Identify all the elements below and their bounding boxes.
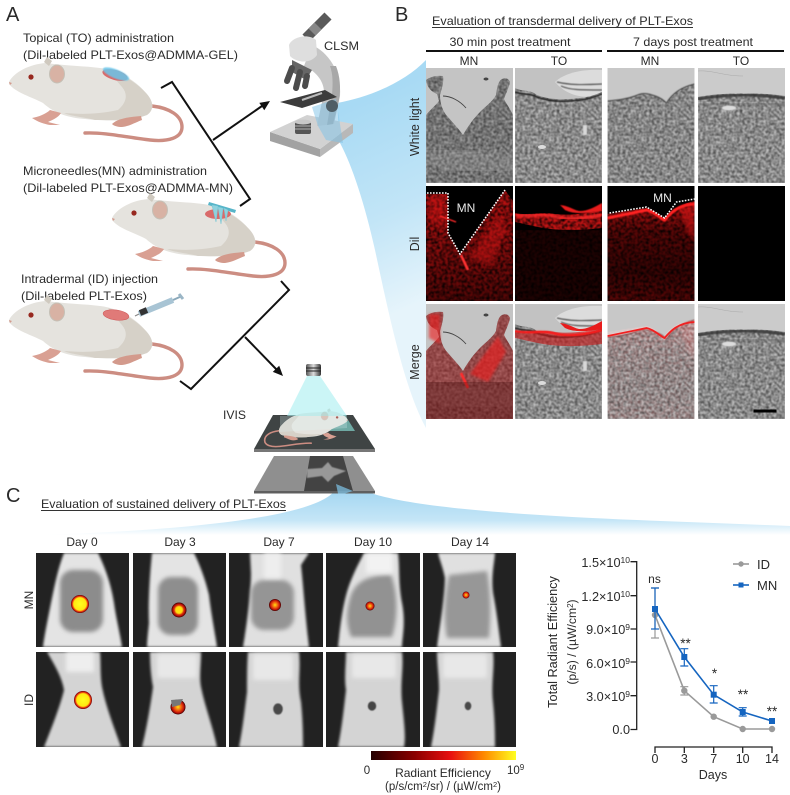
y tick label: 6.0×10 — [586, 657, 625, 671]
y tick label: 9 — [625, 622, 630, 632]
y axis units: 2 — [566, 603, 575, 608]
micrograph: Dil TO 7 days — [698, 186, 785, 301]
y tick label: 9.0×10 — [586, 623, 625, 637]
day label: Day 7 — [263, 535, 295, 549]
column label MN: MN — [460, 54, 478, 68]
row label MN: MN — [22, 591, 36, 609]
panel B: transdermal delivery — [395, 4, 785, 419]
significance: day 3: ** — [680, 636, 691, 651]
micrograph: merge TO 7 days — [698, 304, 785, 419]
x tick label: 10 — [736, 752, 750, 766]
label: CLSM: CLSM — [324, 39, 359, 53]
image: MN day 3 — [133, 553, 226, 647]
micrograph: white light MN 30 min — [426, 68, 513, 183]
significance: ns: ns — [648, 572, 661, 586]
image: ID day 7 — [229, 652, 323, 747]
arrow: to CLSM — [213, 101, 270, 140]
y axis units: (p/s) / (µW/cm — [565, 608, 579, 685]
label: topical administration: Topical (TO) administration — [23, 31, 174, 45]
color bar maximum: 10 — [507, 765, 520, 777]
panel title: Evaluation of transdermal delivery of PLT-Exos — [432, 14, 693, 28]
bracket: MN and ID to IVIS — [180, 281, 289, 389]
icon: syringe — [135, 294, 183, 316]
micrograph: Dil MN 30 min — [426, 186, 513, 301]
micrograph: Dil MN 30 min: MN — [457, 201, 475, 215]
panel title: Evaluation of sustained delivery of PLT-Exos — [41, 497, 286, 511]
label: IVIS: IVIS — [223, 408, 246, 422]
significance: day 10: ** — [738, 687, 749, 702]
image: ID day 10 — [326, 652, 420, 747]
arrow: to IVIS — [245, 337, 283, 376]
light beam: IVIS to panel C — [40, 486, 790, 535]
color bar units: 2 — [493, 780, 497, 789]
column label TO: TO — [551, 54, 567, 68]
image: ID day 14 — [423, 652, 516, 747]
x axis title: Days — [699, 768, 727, 782]
y tick label: 9 — [625, 656, 630, 666]
image: MN day 14 — [423, 553, 516, 647]
micrograph: Dil MN 7 days — [608, 186, 694, 301]
legend: MN: MN — [757, 578, 777, 593]
line chart: total radiant efficiency — [546, 555, 779, 782]
y tick label: 1.5×10 — [581, 556, 621, 570]
day label: Day 0 — [66, 535, 98, 549]
row label Merge: Merge — [408, 344, 422, 380]
micrograph: white light TO 30 min — [515, 68, 602, 183]
y axis units: ) — [565, 599, 579, 603]
micrograph: Dil TO 30 min — [515, 186, 602, 301]
label: intradermal injection: Intradermal (ID) injection — [21, 272, 158, 286]
y axis title: Total Radiant Efficiency — [546, 576, 560, 708]
significance: day 14: ** — [767, 704, 778, 719]
micrograph: merge MN 7 days — [608, 304, 694, 419]
row label White light: White light — [408, 97, 422, 156]
image: MN day 0 — [36, 553, 129, 647]
micrograph: merge MN 30 min — [426, 304, 513, 419]
color bar units: ) — [497, 781, 501, 793]
row label ID: ID — [22, 694, 36, 706]
panel A: administration schematic — [6, 4, 375, 494]
day label: Day 10 — [354, 535, 392, 549]
panel C: sustained delivery — [6, 485, 779, 793]
series: ID — [651, 588, 775, 732]
heading: 7 days: 7 days post treatment — [633, 35, 754, 49]
x tick label: 3 — [681, 752, 688, 766]
panel letter C: C — [6, 485, 20, 507]
day label: Day 3 — [164, 535, 196, 549]
label: intradermal formulation: (Dil-labeled PLT-Exos) — [21, 289, 147, 303]
day label: Day 14 — [451, 535, 489, 549]
y tick label: 3.0×10 — [586, 690, 625, 704]
mouse: microneedles — [112, 193, 285, 276]
micrograph: white light TO 7 days — [698, 68, 785, 183]
label: microneedle formulation: (Dil-labeled PLT-Exos@ADMMA-MN) — [23, 181, 233, 195]
image: ID day 3 — [133, 652, 226, 747]
color bar minimum: 0 — [364, 765, 370, 777]
image: ID day 0 — [36, 652, 129, 747]
bracket: TO and MN to CLSM — [161, 82, 250, 206]
y tick label: 1.2×10 — [581, 590, 621, 604]
column label TO: TO — [733, 54, 749, 68]
color bar units: /sr) / (µW/cm — [427, 781, 493, 793]
label: topical formulation: (Dil-labeled PLT-Exos@ADMMA-GEL) — [23, 48, 238, 62]
label: microneedle administration: Microneedles(MN) administration — [23, 164, 207, 178]
x tick label: 7 — [710, 752, 717, 766]
y tick label: 10 — [621, 589, 630, 599]
x tick label: 14 — [765, 752, 779, 766]
column label MN: MN — [641, 54, 659, 68]
image: MN day 10 — [326, 553, 420, 647]
color bar units: (p/s/cm — [385, 781, 423, 793]
icon: IVIS imager — [254, 364, 375, 494]
x tick label: 0 — [652, 752, 659, 766]
y tick label: 9 — [625, 689, 630, 699]
image: MN day 7 — [229, 553, 323, 647]
series: MN — [651, 588, 774, 724]
light beam: microscope to panel B — [337, 60, 426, 428]
color bar maximum: 9 — [520, 763, 525, 772]
legend: ID: ID — [757, 557, 770, 572]
significance: day 7: * — [712, 666, 718, 681]
heading: 30 min: 30 min post treatment — [450, 35, 571, 49]
mouse: intradermal — [9, 295, 182, 378]
color bar title: Radiant Efficiency — [395, 766, 491, 780]
color bar units: 2 — [423, 780, 427, 789]
panel letter B: B — [395, 4, 408, 26]
row label Dil: Dil — [408, 237, 422, 251]
micrograph: white light MN 7 days — [608, 68, 694, 183]
panel letter A: A — [6, 4, 20, 26]
mouse: topical — [9, 57, 182, 140]
micrograph: Dil MN 7 days: MN — [653, 191, 672, 205]
y tick label: 10 — [621, 555, 630, 565]
legend: ID — [733, 557, 770, 572]
micrograph: merge TO 30 min — [515, 304, 602, 419]
color bar legend — [364, 751, 525, 793]
legend: MN — [733, 578, 777, 593]
y tick label: 0.0 — [612, 723, 630, 737]
icon: microscope — [270, 16, 353, 157]
